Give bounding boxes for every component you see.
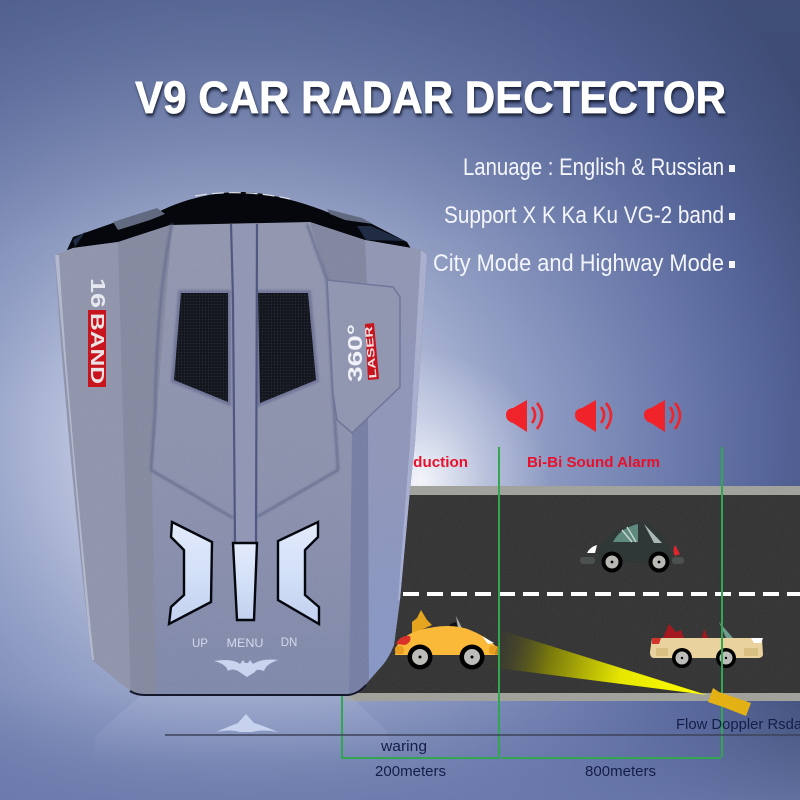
road — [345, 486, 800, 701]
base edge — [130, 685, 366, 695]
badge: laser — [365, 323, 379, 380]
car: yellow — [395, 610, 499, 670]
icon: bat logo — [214, 660, 278, 677]
label: dn: DN — [281, 637, 297, 649]
grille: right — [258, 293, 316, 403]
left side panel — [56, 242, 130, 690]
grille bevel — [174, 293, 316, 403]
button: menu — [233, 543, 257, 620]
label: band: BAND — [87, 313, 107, 384]
shield panel lines — [151, 224, 338, 518]
visor highlights — [195, 193, 290, 199]
label: induction: Laser Induction — [355, 454, 468, 471]
label: up: UP — [192, 638, 208, 650]
label: waring: waring — [380, 738, 427, 755]
feature: language: Lanuage : English & Russian — [463, 154, 724, 181]
button: up — [169, 522, 212, 624]
label: 800 meters: 800meters — [585, 763, 656, 780]
right rim light — [398, 250, 427, 600]
upper right shoulder — [310, 222, 367, 283]
top visor — [67, 192, 413, 262]
icon: speaker 2 — [575, 400, 611, 432]
bullet — [729, 213, 735, 220]
right side panel — [353, 240, 420, 693]
left rim light — [55, 255, 94, 660]
bullet — [729, 165, 735, 172]
label: 200 meters: 200meters — [375, 763, 446, 780]
visor wing left — [73, 232, 85, 247]
feature: bands: Support X K Ka Ku VG-2 band — [444, 202, 724, 229]
radar gun — [708, 688, 751, 716]
label: menu: MENU — [226, 638, 264, 650]
button: down — [278, 522, 319, 624]
lane dashes — [403, 592, 800, 596]
label: sound alarm: Bi-Bi Sound Alarm — [527, 455, 660, 471]
car: dark — [580, 522, 684, 572]
right fold shadow — [349, 413, 369, 700]
body grain — [68, 224, 416, 694]
icon: speaker 1 — [506, 400, 542, 432]
left band shade — [118, 225, 172, 700]
icon: speaker 3 — [644, 400, 680, 432]
label: 16: 16 — [86, 278, 108, 308]
title: V9 CAR RADAR DECTECTOR — [135, 72, 726, 123]
speaker icons — [506, 400, 680, 432]
grille: left — [174, 293, 228, 402]
label: 360: 360° — [345, 324, 367, 382]
bullet — [729, 261, 735, 268]
baseline — [165, 734, 800, 736]
device reflection — [92, 696, 392, 762]
car: cream — [650, 622, 763, 668]
radar beam — [490, 631, 707, 695]
feature list — [433, 154, 735, 277]
radar detector device — [50, 192, 435, 700]
feature: modes: City Mode and Highway Mode — [433, 250, 724, 277]
lamp housing — [327, 280, 400, 433]
label: laser: LASER — [363, 325, 379, 379]
visor trim left — [113, 208, 165, 230]
device body — [50, 215, 435, 700]
distance markers — [342, 447, 722, 758]
badge: band — [88, 310, 106, 387]
center strip — [232, 224, 257, 545]
visor trim right — [327, 209, 373, 224]
visor wing right — [357, 226, 405, 241]
center strip edges — [231, 224, 257, 545]
